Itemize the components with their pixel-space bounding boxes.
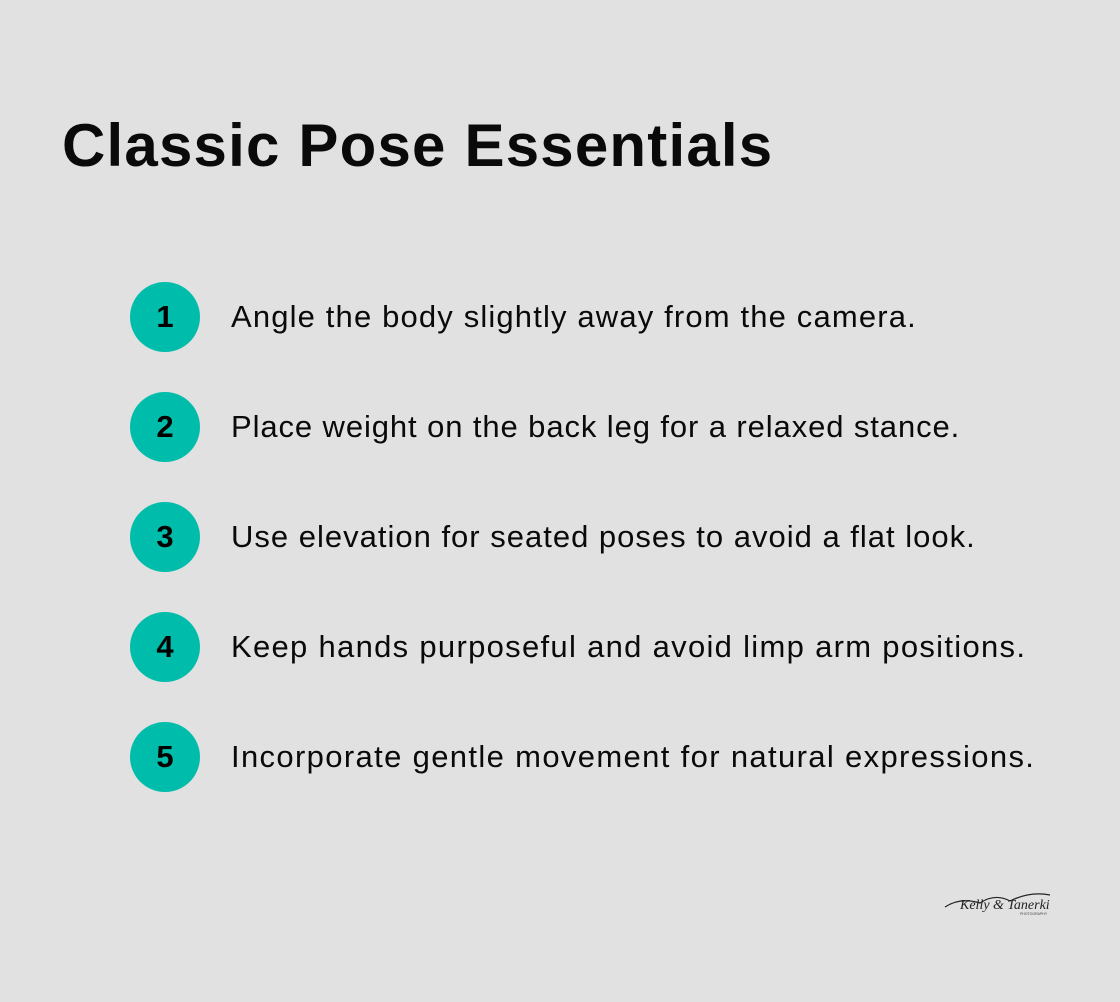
- item 3: Use elevation for seated poses to avoid a flat look.: [231, 519, 976, 554]
- item 1: Angle the body slightly away from the camera.: [231, 299, 917, 334]
- item 2: [130, 392, 960, 462]
- logo: signature: Kelly & Tanerki: [959, 898, 1050, 913]
- item 1: 1: [156, 299, 174, 334]
- item 4: Keep hands purposeful and avoid limp arm positions.: [231, 629, 1026, 664]
- item 3: [130, 502, 976, 572]
- item 5: Incorporate gentle movement for natural expressions.: [231, 739, 1035, 774]
- item 2: 2: [156, 409, 174, 444]
- logo: signature: [944, 893, 1050, 916]
- item 3: 3: [156, 519, 174, 554]
- title: Classic Pose Essentials: [62, 112, 773, 179]
- item 4: [130, 612, 1026, 682]
- item 4: 4: [156, 629, 174, 664]
- item 1: [130, 282, 917, 352]
- item 2: Place weight on the back leg for a relaxed stance.: [231, 409, 960, 444]
- logo: signature: PHOTOGRAPHY: [1020, 912, 1048, 916]
- item 5: 5: [156, 739, 174, 774]
- item 5: [130, 722, 1035, 792]
